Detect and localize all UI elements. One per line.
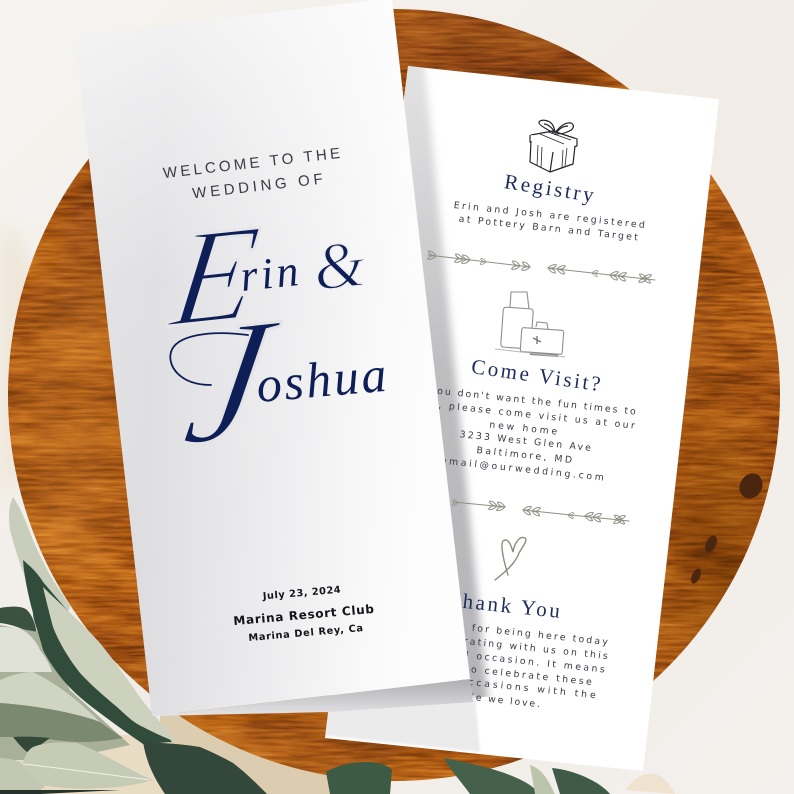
- leaf: sage left leaf upper: [0, 672, 123, 742]
- visit text: [413, 383, 637, 484]
- names in script: J: [173, 280, 289, 482]
- names in script: [162, 195, 388, 482]
- names in script: E: [162, 195, 267, 356]
- thank you text: people we love.: [440, 689, 541, 710]
- leaves: bottom left cluster: [0, 497, 675, 794]
- shadow of front card: [404, 66, 492, 698]
- leaf: pale corner leaf: [0, 758, 45, 790]
- heading: Registry: Registry: [503, 169, 596, 207]
- welcome heading: [162, 145, 341, 202]
- names in script: &: [310, 227, 369, 305]
- event details: Marina Del Rey, Ca: [248, 623, 364, 644]
- vine divider 1: [428, 251, 655, 283]
- heading: Come Visit?: Come Visit?: [470, 354, 602, 396]
- thank you text: special occasions with the: [400, 670, 597, 701]
- welcome heading: WEDDING OF: [191, 171, 324, 202]
- leaf: pale upright leaf: [9, 497, 70, 640]
- front card fold strip: [152, 679, 473, 716]
- vine divider 2: [452, 500, 629, 524]
- leaf: pale long leaf: [43, 587, 177, 742]
- front card: welcome cover: [75, 0, 470, 716]
- back card: program details: [325, 30, 719, 771]
- leaf: dark bottom leaf: [143, 742, 267, 794]
- icon: heart: [495, 537, 526, 580]
- thank you text: so much to celebrate these: [402, 657, 593, 688]
- leaf: base underlayer: [0, 625, 130, 760]
- leaf: sage left leaf lower: [0, 703, 123, 742]
- thank you text: Thank you for being here today: [397, 615, 609, 648]
- names in script: oshua: [254, 346, 388, 413]
- leaf: dark back leaf: [0, 607, 37, 635]
- thank you text: very special occasion. It means: [385, 642, 605, 675]
- leaf: dark right leaf: [444, 758, 540, 794]
- visit text: If you don't want the fun times to: [414, 383, 637, 418]
- registry text: at Pottery Barn and Target: [458, 214, 639, 243]
- flourishes on capitals: [170, 333, 248, 385]
- thank you text: [385, 615, 609, 710]
- visit text: new home: [489, 419, 558, 438]
- event details: July 23, 2024: [261, 585, 341, 602]
- event details: [233, 585, 375, 644]
- leaf: pale left leaf: [0, 627, 52, 672]
- heading: Thank You: Thank You: [446, 587, 562, 623]
- event details: Marina Resort Club: [233, 602, 375, 628]
- icon: gift box: [530, 120, 577, 172]
- wood knots: [691, 474, 762, 584]
- welcome heading: WELCOME TO THE: [162, 145, 341, 182]
- visit text: Baltimore, MD: [476, 445, 573, 466]
- back card lower shading: [320, 695, 480, 752]
- leaf: sage front leaf: [23, 742, 153, 789]
- leaf: dark under leaf: [13, 737, 50, 752]
- visit text: end, please come visit us at our: [413, 397, 635, 432]
- leaf: pale right leaf: [530, 765, 555, 794]
- icon: luggage: [495, 292, 565, 357]
- leaf: dark long leaf: [23, 560, 172, 744]
- names in script: rin: [238, 246, 301, 301]
- registry text: Erin and Josh are registered: [453, 200, 645, 231]
- visit text: email@ourwedding.com: [440, 455, 604, 484]
- visit text: 3233 West Glen Ave: [459, 429, 592, 454]
- thank you text: and celebrating with us on this: [398, 629, 608, 662]
- cream flower fragment: [625, 774, 675, 794]
- leaf: dark bottom-centre leaf: [326, 762, 392, 794]
